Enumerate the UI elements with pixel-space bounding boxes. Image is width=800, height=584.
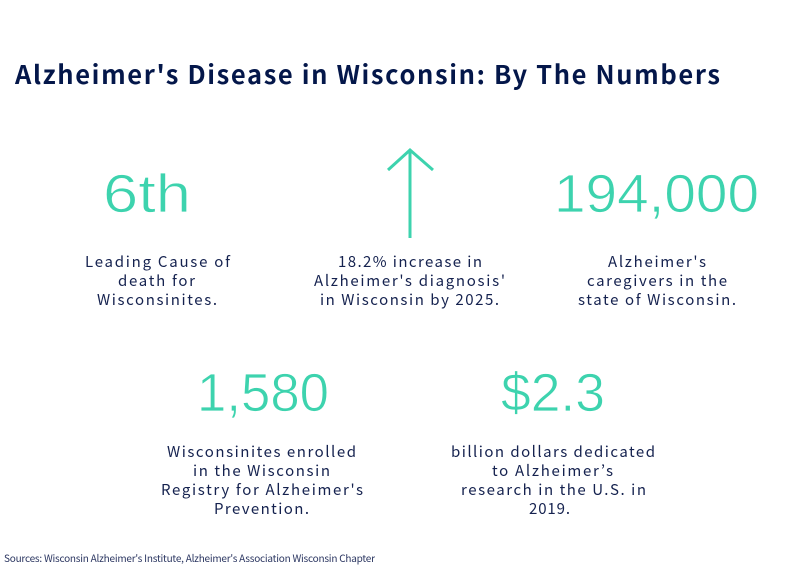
panel: 194,000 caregivers: [554, 164, 759, 310]
stat: 1,580: 1,580: [197, 363, 329, 423]
text block: diagnosis increase: Alzheimer's diagnosis': [314, 270, 505, 291]
stat: 6th: 6th: [103, 164, 191, 224]
stat: 194,000: 194,000: [554, 164, 759, 224]
text block: research funding: billion dollars dedicated: [451, 441, 655, 462]
text block: registry: Registry for Alzheimer's: [161, 479, 363, 500]
text block: caregivers: state of Wisconsin.: [578, 289, 736, 310]
stat: $2.3: $2.3: [501, 363, 605, 423]
text block: caregivers: caregivers in the: [587, 270, 727, 291]
sources footnote: Sources: Wisconsin Alzheimer's Institute, Alzheimer's Association Wisconsin Chapter: [4, 550, 375, 565]
text block: diagnosis increase: in Wisconsin by 2025.: [320, 289, 499, 310]
text block: registry: Wisconsinites enrolled: [167, 441, 356, 462]
text block: leading cause: Leading Cause of: [85, 251, 231, 272]
text block: registry: [161, 441, 363, 519]
text block: leading cause: [85, 251, 231, 310]
panel: 6th leading cause: [85, 164, 231, 310]
text block: leading cause: death for: [118, 270, 195, 291]
text block: registry: Prevention.: [214, 498, 309, 519]
text block: leading cause: Wisconsinites.: [97, 289, 217, 310]
text block: caregivers: [578, 251, 736, 310]
text block: diagnosis increase: [314, 251, 505, 310]
text block: research funding: research in the U.S. in: [461, 479, 646, 500]
panel: $2.3 billion: [451, 363, 655, 519]
panel: 1,580 enrolled: [161, 363, 363, 519]
text block: caregivers: Alzheimer's: [608, 251, 706, 272]
panel: 18.2% increase: [314, 150, 505, 310]
text block: research funding: [451, 441, 655, 519]
text block: research funding: 2019.: [529, 498, 570, 519]
title: Alzheimer's Disease in Wisconsin: By The Numbers: [14, 55, 720, 92]
text block: research funding: to Alzheimer’s: [492, 460, 613, 481]
text block: diagnosis increase: 18.2% increase in: [338, 251, 482, 272]
icon: up arrow: [388, 150, 433, 238]
text block: registry: in the Wisconsin: [193, 460, 330, 481]
